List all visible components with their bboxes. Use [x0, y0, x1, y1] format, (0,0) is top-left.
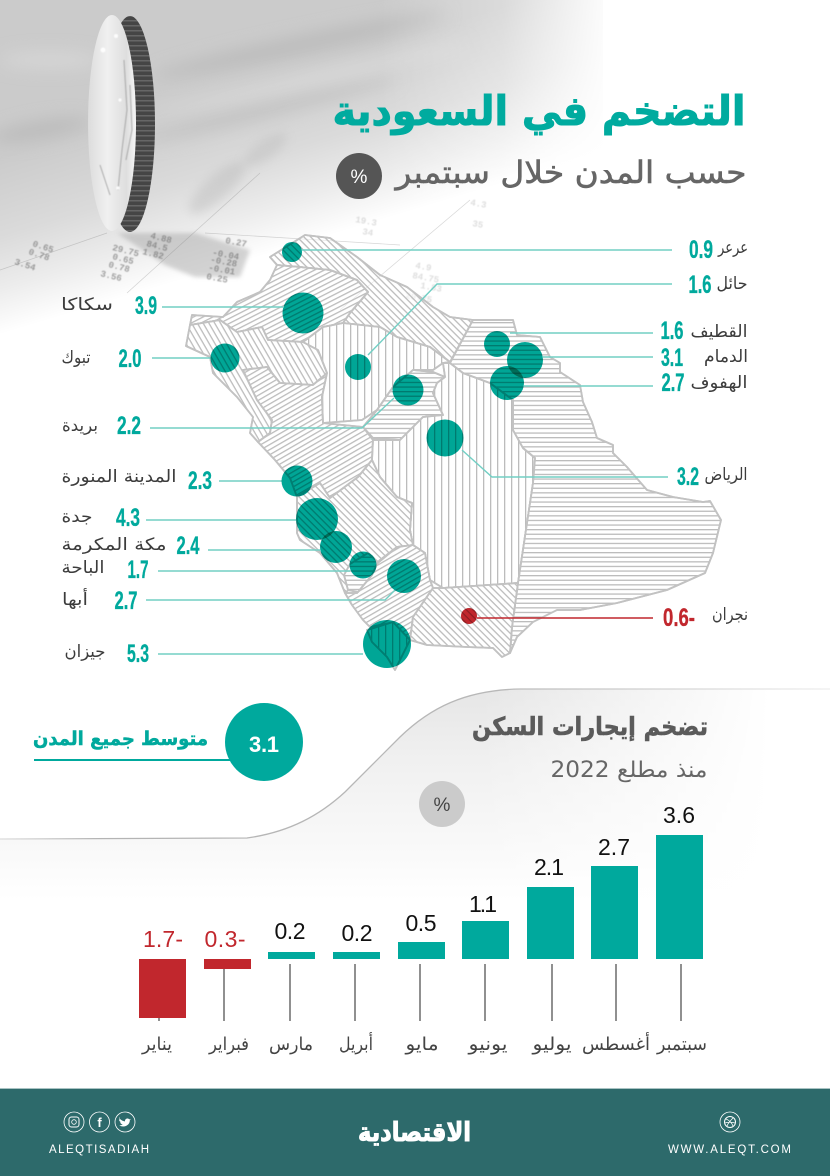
subtitle: حسب المدن خلال سبتمبر: [393, 155, 746, 191]
city labels left: 1.7: [128, 556, 148, 584]
background photo: coin on financial sheet: 19.3: [354, 215, 377, 229]
background photo: coin on financial sheet: -0.28: [209, 255, 238, 270]
city labels left: جدة: [62, 507, 92, 527]
region: Tabuk: [186, 320, 327, 442]
region: Qassim: [363, 370, 445, 440]
month labels: مارس: [269, 1034, 313, 1055]
rent section curved background: [0, 689, 830, 900]
rent subheading: منذ مطلع 2022: [550, 758, 708, 783]
city labels left: سكاكا: [61, 295, 113, 315]
region: Najran: [410, 583, 518, 657]
month labels: يوليو: [531, 1034, 572, 1055]
city labels right: الدمام: [704, 347, 748, 367]
percent badge: %: [351, 167, 368, 188]
city labels left: [61, 292, 212, 668]
background photo: coin on financial sheet: 34: [361, 227, 374, 239]
city labels left: 3.9: [135, 292, 157, 320]
background photo: coin on financial sheet: 0.65: [31, 239, 55, 256]
background photo: coin on financial sheet: -0.01: [207, 263, 236, 278]
month labels: مايو: [404, 1034, 438, 1055]
callout: average of all cities: 3.1: [249, 732, 279, 757]
region: Medina: [243, 367, 373, 498]
rent heading: تضخم إيجارات السكن: [472, 712, 708, 742]
city labels right: 0.6-: [663, 604, 695, 632]
background photo: coin on financial sheet: 0.78: [27, 247, 51, 264]
city labels right: 0.9: [689, 236, 713, 264]
city labels right: نجران: [712, 605, 748, 625]
background photo: coin on financial sheet: 0.25: [205, 272, 228, 286]
city labels right: حائل: [716, 274, 748, 294]
background photo: coin on financial sheet: 29.75: [404, 291, 433, 306]
background photo: coin on financial sheet: [0, 0, 603, 335]
value labels: 0.2: [342, 920, 372, 946]
background photo: coin on financial sheet: 1.83: [419, 281, 442, 295]
background photo: coin on financial sheet: 0.65: [111, 252, 135, 267]
city labels right: الهفوف: [690, 373, 748, 393]
city labels left: مكة المكرمة: [62, 535, 166, 555]
region: Riyadh: [372, 363, 535, 588]
city labels right: 3.1: [661, 344, 683, 372]
city labels left: 2.0: [118, 345, 142, 373]
city labels left: 2.7: [114, 587, 138, 615]
percent badge rent: [419, 781, 465, 827]
value labels: 3.6: [663, 802, 695, 828]
value labels: 0.2: [274, 918, 306, 944]
icon: facebook: f: [97, 1115, 102, 1130]
ticks: [159, 964, 681, 1021]
icon: instagram: [64, 1112, 84, 1132]
city labels left: 2.3: [188, 467, 212, 495]
city labels left: 2.4: [176, 532, 200, 560]
background photo: coin on financial sheet: -0.04: [211, 248, 240, 263]
city labels left: 2.2: [117, 412, 141, 440]
social handle: ALEQTISADIAH: [49, 1144, 149, 1156]
value labels: 1.1: [469, 891, 497, 917]
website url: WWW.ALEQT.COM: [668, 1144, 791, 1156]
month labels: سبتمبر: [656, 1034, 707, 1055]
region: Al Baha: [344, 553, 378, 592]
region: Asir: [345, 545, 433, 640]
city labels right: 1.6: [660, 317, 684, 345]
month labels: [141, 1032, 707, 1055]
background photo: coin on financial sheet: 4.88: [149, 231, 173, 246]
value labels: [143, 802, 695, 952]
city labels left: أبها: [62, 588, 88, 610]
background photo: coin on financial sheet: 3.54: [13, 257, 37, 274]
icon: website: [720, 1112, 740, 1132]
background photo: coin on financial sheet: 29.75: [111, 243, 140, 259]
value labels: 2.1: [534, 854, 564, 880]
city labels left: جيزان: [64, 642, 106, 662]
city labels right: [660, 236, 748, 632]
month labels: فبراير: [208, 1034, 249, 1055]
value labels: 1.7-: [143, 926, 183, 952]
background photo: coin on financial sheet: 0.78: [107, 260, 131, 275]
leader lines: [146, 250, 672, 654]
city labels left: 4.3: [116, 504, 140, 532]
background photo: coin on financial sheet: 84.5: [145, 239, 169, 254]
icon: twitter: [115, 1112, 135, 1132]
icon: facebook: [90, 1112, 110, 1132]
background photo: coin on financial sheet: 4.3: [469, 198, 487, 211]
value labels: 2.7: [598, 834, 630, 860]
value labels: 0.3-: [204, 926, 246, 952]
month labels: أغسطس: [582, 1032, 650, 1055]
region: Makkah: [297, 460, 413, 593]
region: Eastern Province: [450, 320, 721, 653]
logo: الاقتصادية: [358, 1118, 471, 1148]
background photo: coin on financial sheet: 3.56: [99, 269, 123, 284]
bars: [139, 835, 703, 1018]
percent badge rent: %: [434, 795, 451, 816]
background photo: coin on financial sheet: 84.75: [411, 271, 440, 286]
region: Hail: [303, 323, 450, 423]
callout: average of all cities: [33, 703, 303, 781]
city bubbles: [210, 242, 543, 668]
bar chart: rent inflation: [139, 802, 707, 1055]
month labels: يناير: [141, 1034, 172, 1055]
percent badge: [336, 153, 382, 199]
city labels left: المدينة المنورة: [62, 467, 176, 487]
city labels left: بريدة: [62, 416, 98, 436]
background photo: coin on financial sheet: 4.9: [414, 261, 432, 274]
city labels right: 1.6: [688, 271, 712, 299]
city labels left: تبوك: [62, 348, 91, 368]
footer band: [0, 1088, 830, 1176]
region: northern borders: [270, 235, 473, 362]
map of Saudi regions: [186, 235, 721, 670]
city labels left: 5.3: [127, 640, 149, 668]
city labels right: القطيف: [690, 322, 748, 342]
region: Jazan: [367, 622, 410, 670]
city labels right: الرياض: [704, 465, 748, 485]
background photo: coin on financial sheet: 1.82: [141, 247, 165, 262]
city labels right: عرعر: [717, 238, 748, 258]
background photo: coin on financial sheet: 35: [471, 219, 484, 231]
value labels: 0.5: [406, 910, 436, 936]
callout: average of all cities: متوسط جميع المدن: [33, 728, 208, 750]
city labels right: 2.7: [662, 369, 684, 397]
month labels: يونيو: [467, 1034, 508, 1055]
icon: coin standing on edge: [88, 15, 155, 232]
region: Al Jouf: [190, 265, 368, 342]
title: التضخم في السعودية: [332, 87, 746, 135]
city labels left: الباحة: [62, 558, 104, 578]
month labels: أبريل: [339, 1032, 373, 1055]
city labels right: 3.2: [677, 463, 699, 491]
background photo: coin on financial sheet: 0.27: [224, 236, 247, 250]
